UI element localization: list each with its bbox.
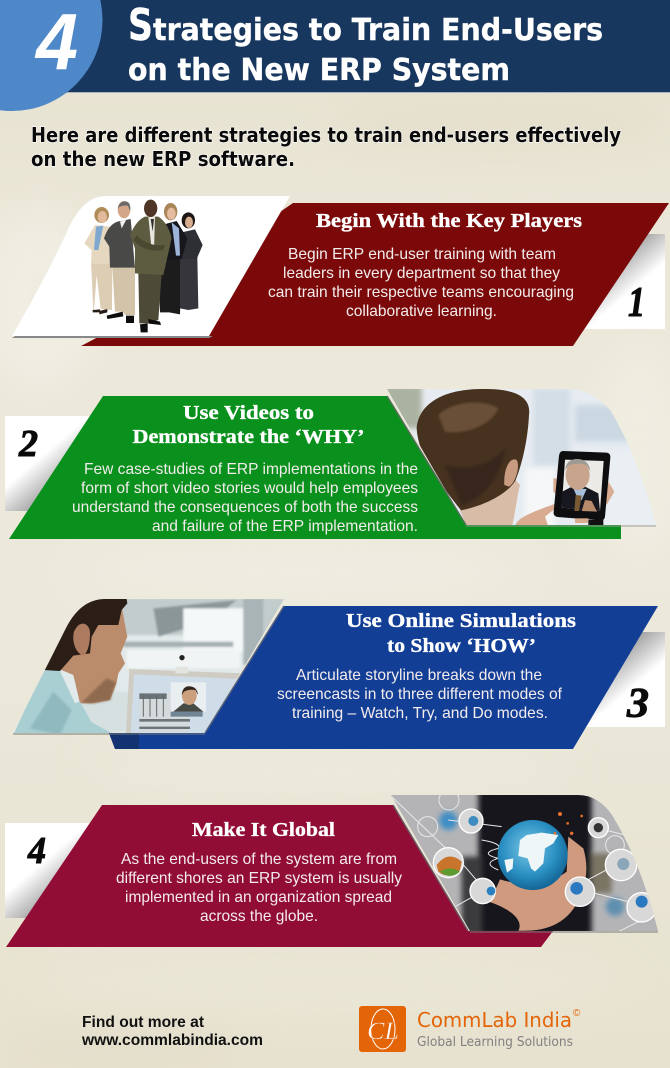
body text: and failure of the ERP implementation.	[152, 518, 418, 535]
body text: can train their respective teams encouraging	[268, 284, 574, 301]
panel: strategy 4	[5, 790, 665, 947]
number tab 2: 2	[18, 423, 38, 465]
heading: Make It Global	[192, 819, 335, 841]
body text: implemented in an organization spread	[125, 889, 392, 906]
number tab 1: 1	[628, 280, 645, 326]
body text: Few case-studies of ERP implementations in the	[84, 461, 418, 478]
photo: business team	[12, 196, 290, 338]
panel: strategy 1	[12, 196, 669, 346]
title: S	[128, 0, 153, 51]
red panel	[81, 203, 669, 346]
logo mark: CL	[367, 1018, 399, 1045]
logo: CommLab India	[359, 1006, 581, 1052]
body text	[72, 461, 418, 535]
logo mark	[359, 1006, 406, 1052]
crimson panel	[6, 805, 553, 947]
number tab 4: 4	[27, 830, 46, 872]
number tab 3: 3	[626, 681, 649, 727]
heading: Demonstrate the ‘WHY’	[132, 426, 364, 448]
heading	[132, 402, 364, 448]
body text: collaborative learning.	[346, 303, 497, 320]
heading: Begin With the Key Players	[316, 210, 582, 232]
number tab 3	[583, 632, 665, 727]
footer link text: www.commlabindia.com	[81, 1032, 263, 1049]
green panel	[9, 396, 621, 539]
panel: strategy 2	[5, 385, 665, 539]
photo: man viewing tablet	[385, 385, 665, 530]
copyright mark: ©	[573, 1008, 581, 1019]
body text: As the end-users of the system are from	[121, 851, 397, 868]
panel: strategy 3	[10, 595, 665, 749]
body text: Articulate storyline breaks down the	[296, 667, 542, 684]
body text: screencasts in to three different modes of	[277, 686, 563, 703]
body text: understand the consequences of both the success	[72, 499, 418, 516]
heading	[346, 610, 576, 657]
heading: Use Videos to	[183, 402, 314, 424]
body text	[277, 667, 563, 722]
intro text: on the new ERP software.	[31, 147, 295, 171]
photo: man at video call	[13, 599, 284, 733]
header banner	[0, 0, 670, 111]
body text: training – Watch, Try, and Do modes.	[292, 705, 548, 722]
footer link text	[81, 1014, 263, 1049]
number tab 1	[583, 234, 665, 329]
intro text	[31, 123, 621, 171]
photo: globe in hand	[391, 795, 658, 931]
header circle	[0, 0, 102, 111]
number tab 4	[5, 823, 95, 918]
title: trategies to Train End-Users	[153, 13, 603, 48]
number tab 2	[5, 416, 95, 511]
heading: to Show ‘HOW’	[387, 635, 536, 657]
blue panel	[109, 606, 658, 749]
title	[128, 0, 603, 88]
body text: across the globe.	[200, 908, 318, 925]
heading: Use Online Simulations	[346, 610, 576, 632]
body text: leaders in every department so that they	[283, 265, 560, 282]
body text: different shores an ERP system is usually	[116, 870, 402, 887]
title: on the New ERP System	[128, 53, 510, 88]
body text	[116, 851, 402, 925]
subject skin, shirt and hair stay inside this photo group	[61, 609, 128, 704]
tagline: Global Learning Solutions	[417, 1035, 573, 1050]
body text: Begin ERP end-user training with team	[288, 246, 556, 263]
body text: form of short video stories would help employees	[81, 480, 418, 497]
logo wordmark: CommLab India	[417, 1008, 572, 1032]
footer link text: Find out more at	[82, 1014, 205, 1031]
body text	[268, 246, 574, 320]
